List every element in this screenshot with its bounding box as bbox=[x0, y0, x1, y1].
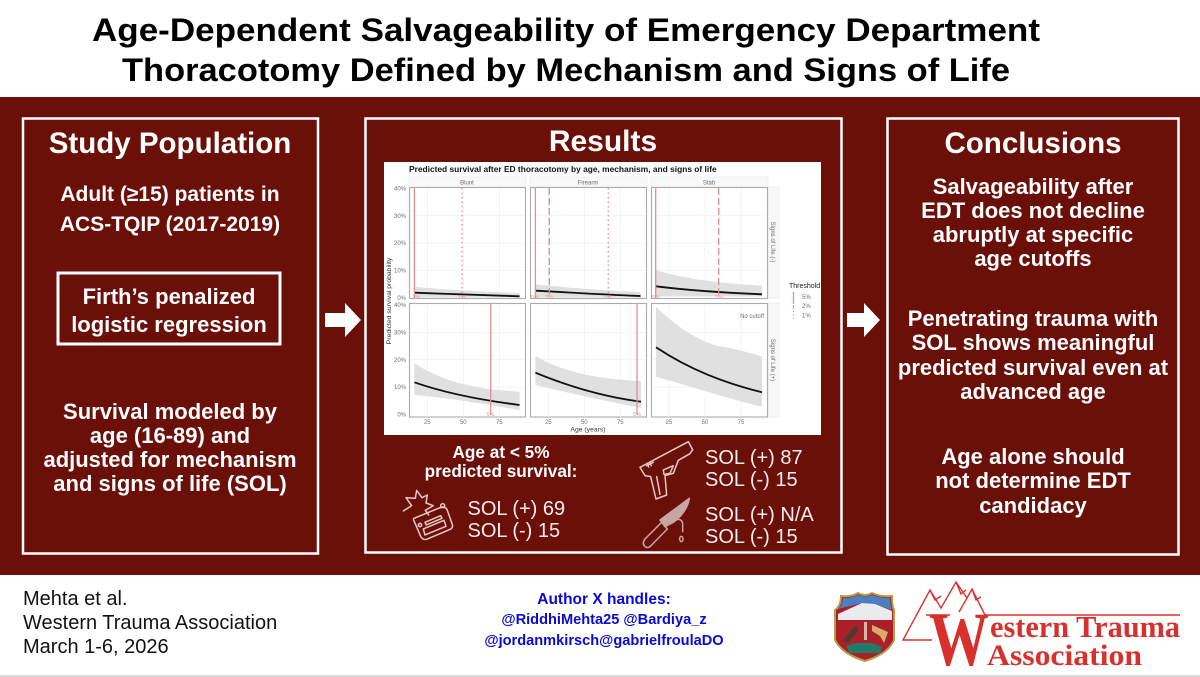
legend: threshold bbox=[789, 283, 820, 320]
heading: results: Results bbox=[549, 125, 657, 158]
text: blunt results: SOL (+) 69 bbox=[468, 498, 565, 520]
x axis bbox=[424, 420, 745, 434]
icon: bloody knife bbox=[643, 498, 689, 548]
panel: blunt SOL positive: 5% bbox=[487, 412, 495, 418]
heading: conclusions: Conclusions bbox=[944, 127, 1122, 160]
chart: predicted survival faceted plot bbox=[384, 162, 821, 435]
panel: study population bbox=[23, 118, 318, 554]
text: patient cohort: Adult (≥15) patients in bbox=[60, 183, 280, 206]
text: patient cohort bbox=[60, 183, 280, 236]
y axis: 20% bbox=[394, 241, 407, 247]
x axis: 25 bbox=[545, 420, 552, 426]
text: conclusion one: EDT does not decline bbox=[921, 198, 1145, 223]
box: statistical method: logistic regression bbox=[71, 312, 267, 337]
text: survival model: and signs of life (SOL) bbox=[53, 471, 287, 496]
x axis: 25 bbox=[424, 420, 431, 426]
panel: blunt SOL negative: 2% bbox=[412, 295, 420, 301]
y axis: 10% bbox=[394, 385, 407, 391]
logo: shield emblem bbox=[835, 593, 894, 661]
facet headers: Signs of Life (+) bbox=[769, 339, 775, 381]
title: Age-Dependent Salvageability of Emergency Department bbox=[92, 12, 1040, 48]
facet headers: Blunt bbox=[460, 180, 474, 186]
footer: citation bbox=[23, 588, 277, 658]
text: stab results: SOL (-) 15 bbox=[705, 526, 798, 548]
text: conclusion two bbox=[898, 306, 1169, 404]
panel: results bbox=[366, 118, 842, 552]
y axis: 30% bbox=[394, 214, 407, 220]
icon: handgun bbox=[640, 442, 693, 499]
panel: firearm SOL positive: 5% bbox=[633, 412, 641, 418]
facet headers bbox=[409, 177, 779, 417]
panel: firearm SOL negative: 2% bbox=[545, 295, 553, 301]
panel: stab SOL negative: 5% bbox=[652, 295, 660, 301]
panel: firearm SOL negative: 5% bbox=[531, 295, 539, 301]
logo: association wordmark: Association bbox=[987, 639, 1142, 672]
text: survival model: adjusted for mechanism bbox=[43, 447, 297, 472]
text: conclusion two: Penetrating trauma with bbox=[908, 306, 1158, 331]
y axis: Predicted survival probability bbox=[386, 257, 393, 344]
text: stab results: SOL (+) N/A bbox=[705, 504, 814, 526]
facet headers: Signs of Life (-) bbox=[769, 222, 775, 262]
text: blunt results bbox=[468, 498, 565, 542]
footer: author handles: @jordanmkirsch@gabrielfroulaDO bbox=[484, 633, 724, 649]
footer: citation: March 1-6, 2026 bbox=[23, 636, 169, 658]
panel: firearm SOL negative: 1% bbox=[604, 295, 612, 301]
footer: author handles bbox=[484, 591, 724, 649]
footer: author handles: @RiddhiMehta25 @Bardiya_z bbox=[501, 612, 707, 628]
arrow: results to conclusions bbox=[847, 303, 880, 337]
text: conclusion one: abruptly at specific bbox=[933, 222, 1133, 247]
facet headers: Stab bbox=[703, 180, 716, 186]
text: conclusion two: advanced age bbox=[960, 379, 1106, 404]
arrow: population to results bbox=[325, 303, 361, 337]
text: conclusion three: not determine EDT bbox=[935, 468, 1131, 493]
text: survival model: Survival modeled by bbox=[63, 399, 278, 424]
text: patient cohort: ACS-TQIP (2017-2019) bbox=[60, 213, 280, 236]
x axis: 25 bbox=[666, 420, 673, 426]
y axis: 30% bbox=[394, 330, 407, 336]
box: statistical method: Firth’s penalized bbox=[83, 284, 255, 309]
legend: threshold: Threshold bbox=[789, 283, 820, 290]
logo: association wordmark: estern Trauma bbox=[990, 609, 1180, 644]
footer: citation: Western Trauma Association bbox=[23, 612, 277, 634]
x axis: 50 bbox=[702, 420, 709, 426]
text: conclusion one bbox=[921, 174, 1145, 271]
legend: threshold: 5% bbox=[802, 295, 811, 301]
panel: stab SOL negative bbox=[652, 188, 768, 301]
text: conclusion one: age cutoffs bbox=[974, 246, 1092, 271]
text: conclusion two: SOL shows meaningful bbox=[912, 330, 1154, 355]
heading: study population: Study Population bbox=[49, 127, 291, 160]
text: firearm results: SOL (-) 15 bbox=[705, 469, 798, 491]
panel: firearm SOL positive bbox=[530, 304, 646, 418]
y axis: 40% bbox=[394, 303, 407, 309]
panel: firearm SOL negative bbox=[530, 188, 646, 301]
panel: stab SOL positive bbox=[652, 304, 768, 417]
title bbox=[92, 12, 1040, 88]
text: age threshold heading: Age at < 5% bbox=[453, 442, 549, 462]
footer: author handles: Author X handles: bbox=[537, 591, 671, 608]
panel: stab SOL positive: No cutoff bbox=[740, 314, 764, 320]
text: age threshold heading bbox=[425, 442, 577, 481]
text: survival model: age (16-89) and bbox=[90, 423, 250, 448]
x axis: 75 bbox=[738, 420, 745, 426]
text: stab results bbox=[705, 504, 814, 548]
text: conclusion two: predicted survival even at bbox=[898, 355, 1169, 380]
x axis: 50 bbox=[581, 420, 588, 426]
x axis: 50 bbox=[460, 420, 467, 426]
x axis: 75 bbox=[617, 420, 624, 426]
text: conclusion three: candidacy bbox=[979, 493, 1088, 518]
legend: threshold: 2% bbox=[802, 304, 811, 310]
text: conclusion three: Age alone should bbox=[941, 444, 1125, 469]
y axis: 40% bbox=[394, 186, 407, 192]
panel: blunt SOL negative bbox=[410, 188, 526, 301]
y axis: 10% bbox=[394, 268, 407, 274]
legend: threshold: 1% bbox=[802, 314, 811, 320]
text: firearm results: SOL (+) 87 bbox=[705, 447, 803, 469]
panel: conclusions bbox=[888, 118, 1178, 554]
box: statistical method bbox=[58, 273, 280, 344]
y axis: 0% bbox=[397, 296, 407, 302]
text: conclusion three bbox=[935, 444, 1131, 518]
text: conclusion one: Salvageability after bbox=[933, 174, 1134, 199]
footer: citation: Mehta et al. bbox=[23, 588, 128, 610]
y axis: 20% bbox=[394, 358, 407, 364]
maroon main band bbox=[0, 97, 1200, 575]
title: Thoracotomy Defined by Mechanism and Signs of Life bbox=[122, 52, 1010, 88]
y axis bbox=[386, 186, 407, 418]
text: survival model bbox=[43, 399, 297, 496]
panel: blunt SOL negative: 1% bbox=[458, 295, 466, 301]
logo: mountains outline bbox=[903, 582, 1180, 640]
logo: association wordmark bbox=[929, 598, 1180, 677]
y axis: 0% bbox=[397, 412, 407, 418]
chart title: Predicted survival after ED thoracotomy by age, mechanism, and signs of life bbox=[409, 164, 717, 174]
x axis: 75 bbox=[496, 420, 503, 426]
text: age threshold heading: predicted survival: bbox=[425, 461, 577, 481]
text: firearm results bbox=[705, 447, 803, 491]
panel: stab SOL negative: 2% bbox=[715, 295, 723, 301]
icon: car crash bbox=[403, 490, 453, 540]
x axis: Age (years) bbox=[570, 426, 606, 434]
text: blunt results: SOL (-) 15 bbox=[468, 520, 560, 542]
panel: blunt SOL positive bbox=[410, 304, 526, 418]
facet headers: Firearm bbox=[578, 180, 598, 186]
